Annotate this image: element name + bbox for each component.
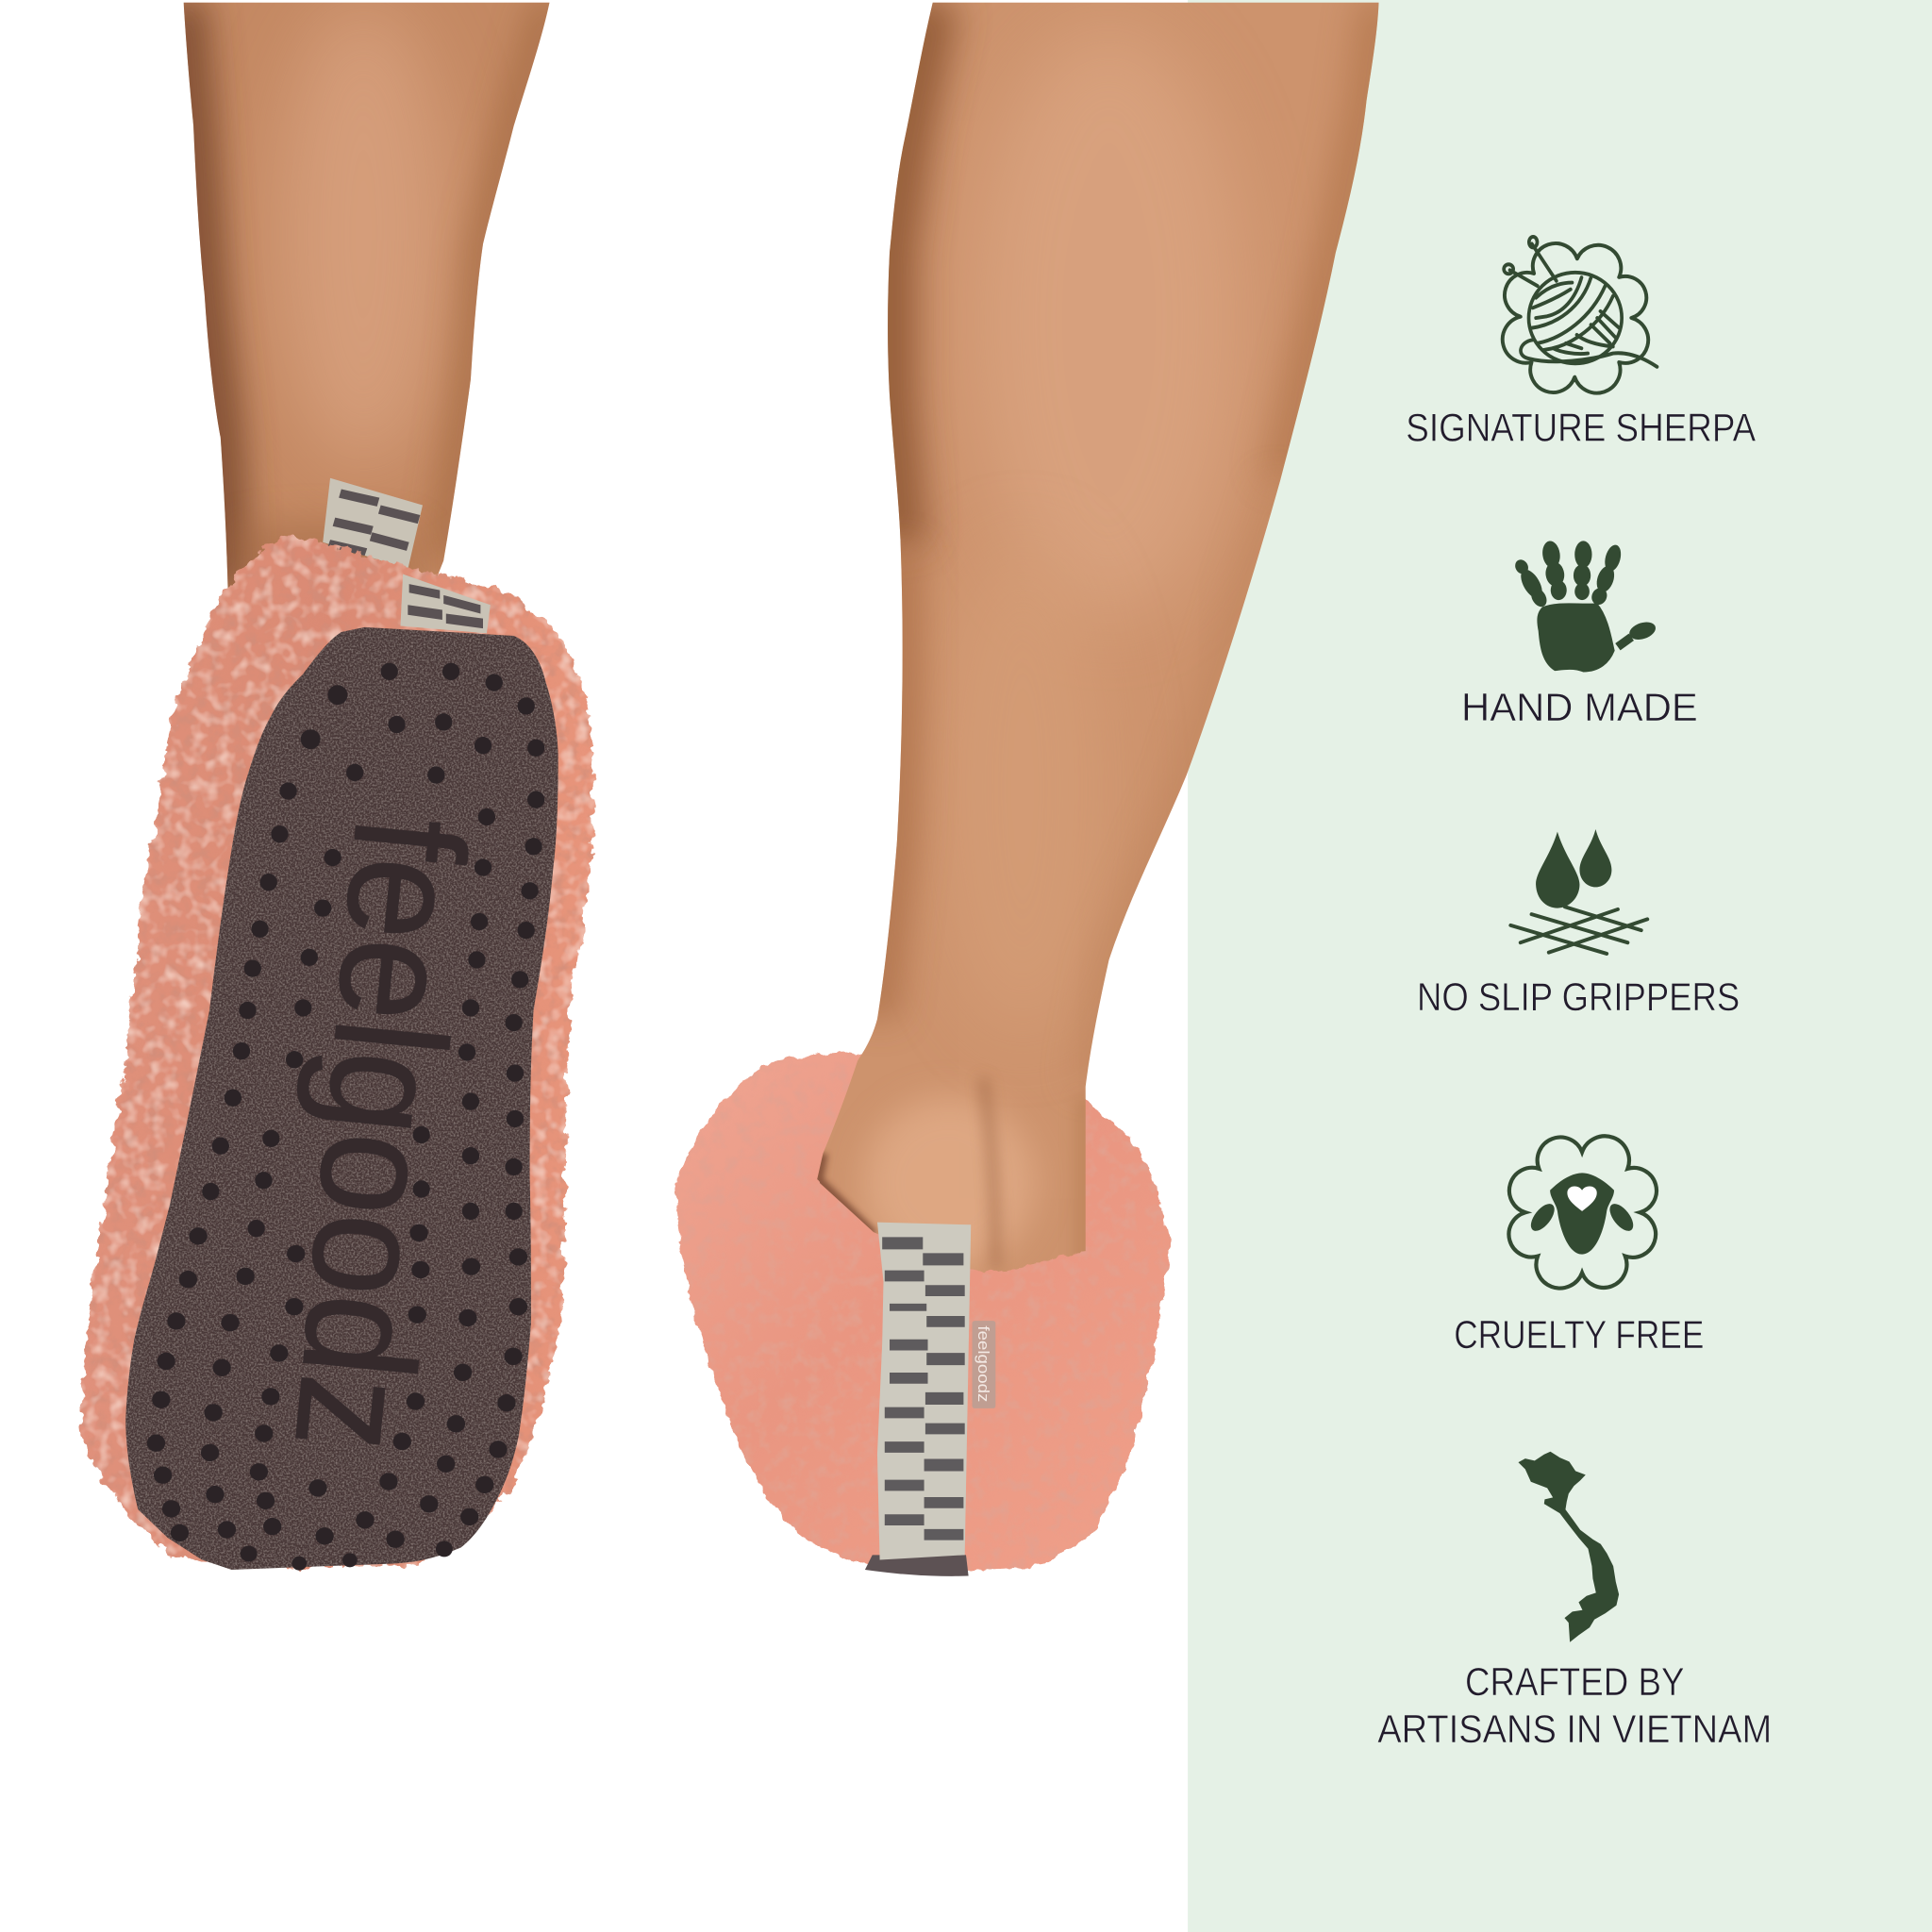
icon: handprint bbox=[1512, 540, 1657, 672]
feature: no slip grippers bbox=[1417, 829, 1740, 1019]
label: no slip grippers: NO SLIP GRIPPERS bbox=[1417, 974, 1740, 1019]
label: cruelty free: CRUELTY FREE bbox=[1454, 1312, 1704, 1357]
left slipper fuzzy body bbox=[81, 535, 592, 1567]
label: crafted by artisans in vietnam: ARTISANS IN VIETNAM bbox=[1377, 1707, 1772, 1751]
icon: yarn ball and needles bbox=[1503, 237, 1657, 393]
icon: drops over woven net bbox=[1510, 829, 1647, 954]
label: crafted by artisans in vietnam: CRAFTED BY bbox=[1465, 1659, 1684, 1704]
icon: map of vietnam bbox=[1518, 1452, 1619, 1642]
feature: crafted in vietnam bbox=[1377, 1452, 1772, 1751]
right leg bbox=[801, 0, 1392, 1293]
feature: signature sherpa bbox=[1406, 237, 1756, 450]
no-slip gripper dots bbox=[147, 663, 544, 1571]
feature: cruelty free bbox=[1454, 1136, 1704, 1357]
left slipper upper heel tab bbox=[323, 478, 423, 569]
label: signature sherpa: SIGNATURE SHERPA bbox=[1406, 406, 1756, 450]
panel: features background bbox=[1188, 0, 1932, 1932]
sole logo: feelgoodz bbox=[261, 810, 498, 1458]
label: hand made: HAND MADE bbox=[1461, 685, 1698, 729]
feature: hand made bbox=[1461, 540, 1698, 729]
left leg bbox=[173, 0, 567, 604]
right slipper sole edge bbox=[865, 1555, 969, 1576]
left slipper sole bbox=[125, 627, 558, 1570]
right slipper brand label: feelgoodz bbox=[974, 1325, 992, 1402]
right slipper brand label bbox=[973, 1321, 995, 1408]
right slipper heel tab bbox=[877, 1223, 971, 1560]
icon: sheep in flower bbox=[1508, 1136, 1657, 1289]
left slipper bbox=[81, 478, 592, 1571]
left slipper lower heel tab bbox=[400, 575, 491, 633]
right slipper front collar bbox=[692, 1164, 1170, 1571]
right slipper back bbox=[675, 1052, 1170, 1571]
